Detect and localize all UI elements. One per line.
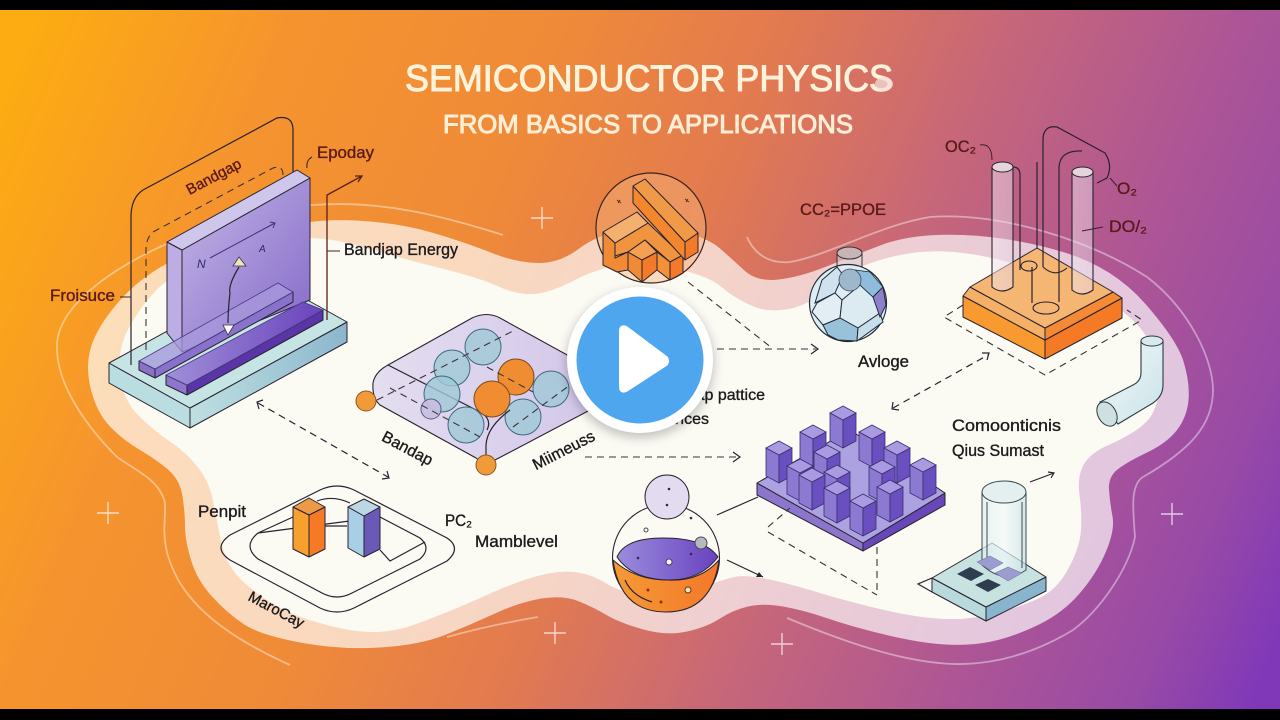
dashed double arrow left bbox=[258, 403, 388, 477]
platform upper layer bbox=[963, 248, 1122, 340]
orange block bbox=[293, 498, 325, 557]
block connectors bbox=[317, 498, 425, 561]
title smudge bbox=[875, 77, 893, 91]
small x marks bbox=[617, 199, 689, 203]
lattice stem bbox=[486, 410, 510, 456]
label: Qius Sumast: Qius Sumast bbox=[952, 442, 1044, 460]
blue block bbox=[348, 499, 380, 557]
tube right bbox=[1072, 167, 1093, 294]
substrate bbox=[932, 543, 1046, 621]
plate letter N: N bbox=[197, 257, 206, 271]
sparkle plus marks bbox=[97, 207, 1183, 655]
arrowheads left bbox=[257, 400, 389, 479]
label: OC2: OC₂ bbox=[945, 138, 976, 156]
prism front edge bbox=[388, 365, 489, 430]
arrowhead bbox=[756, 572, 763, 577]
bottom right facet bbox=[857, 313, 883, 341]
lower left block bbox=[603, 232, 628, 272]
circle lens bbox=[596, 173, 706, 283]
diagram: liquid sphere bbox=[612, 475, 720, 612]
back tube lines bbox=[1013, 127, 1110, 303]
long crystal bar bbox=[633, 179, 698, 260]
plate arrow bbox=[210, 222, 275, 258]
centre light facet bbox=[840, 285, 880, 328]
label: Froisuce: Froisuce bbox=[50, 287, 115, 305]
liquid arc bbox=[625, 580, 652, 602]
icon: bent pipe bbox=[1093, 336, 1163, 430]
outer rounded track bbox=[221, 486, 454, 612]
dashed connector from crystal bbox=[688, 282, 772, 348]
array base bbox=[757, 430, 945, 551]
dashed guides under array bbox=[768, 508, 877, 595]
diagram: orange platform with tubes bbox=[944, 127, 1147, 375]
pillars bbox=[766, 406, 936, 536]
leader ticks bbox=[120, 157, 340, 297]
dashed arrow to flask bbox=[717, 348, 816, 350]
label: Miimeuss: Miimeuss bbox=[530, 428, 598, 474]
flask neck bbox=[837, 247, 862, 275]
bar one bbox=[139, 283, 293, 378]
bottom blue facet bbox=[823, 318, 858, 341]
frame lines bbox=[131, 118, 293, 365]
label: PC2: PC₂ bbox=[445, 512, 472, 530]
arrow beyond sphere bbox=[727, 560, 763, 577]
small top circle bbox=[645, 475, 689, 519]
purple plate bbox=[167, 170, 310, 352]
lattice atom lilac bbox=[421, 399, 441, 419]
label: Penpit: Penpit bbox=[198, 503, 246, 521]
decorative contour lines bbox=[57, 204, 1213, 665]
label: Bandap: Bandap bbox=[379, 429, 436, 470]
lattice dashed axes bbox=[377, 330, 570, 437]
lattice atoms blue bbox=[424, 329, 569, 443]
tab outline bbox=[918, 578, 932, 592]
arrowhead to flask bbox=[811, 344, 818, 354]
top right blue facet bbox=[855, 270, 883, 297]
prism body bbox=[373, 314, 640, 462]
bar two bbox=[166, 302, 323, 395]
purple liquid surface bbox=[617, 538, 718, 580]
play button bbox=[566, 287, 714, 438]
label: Avloge: Avloge bbox=[858, 353, 909, 371]
energy arrow with triangles bbox=[223, 257, 246, 335]
label: Epoday: Epoday bbox=[317, 144, 375, 162]
label: Devices: Devices bbox=[652, 411, 709, 428]
diagram: purple pillar array bbox=[757, 406, 945, 551]
diagram: two-block circuit bbox=[198, 486, 558, 632]
arrowhead to array bbox=[733, 452, 740, 462]
left light facet bbox=[812, 293, 842, 325]
right lower block bbox=[657, 252, 683, 280]
inner rounded track bbox=[250, 517, 426, 597]
lattice atoms orange bbox=[474, 359, 534, 417]
chip squares lilac bbox=[977, 556, 1022, 581]
violet facet bbox=[873, 287, 886, 317]
chip squares dark bbox=[957, 567, 1001, 592]
arrow into array bbox=[717, 497, 758, 515]
sphere outline bbox=[612, 504, 720, 612]
diagram: polyhedral flask bbox=[800, 201, 909, 371]
bubbles bbox=[637, 488, 707, 604]
plate letter A: A bbox=[258, 244, 266, 255]
label: CC2=PPOE: CC₂=PPOE bbox=[800, 201, 886, 219]
inner cream blob panel bbox=[119, 238, 1161, 632]
label: Bandgap pattice: Bandgap pattice bbox=[649, 387, 765, 404]
diagram: substrate with cylinder bbox=[918, 417, 1061, 621]
second crystal bar top bbox=[603, 212, 648, 243]
diagram: lattice prism bbox=[356, 314, 640, 475]
dashed arrow to array bbox=[585, 456, 738, 458]
label: Comoonticnis: Comoonticnis bbox=[952, 417, 1061, 435]
subtitle: FROM BASICS TO APPLICATIONS bbox=[443, 109, 853, 139]
label: O2: O₂ bbox=[1117, 180, 1137, 198]
leader arrow bbox=[1030, 472, 1054, 482]
title: SEMICONDUCTOR PHYSICS bbox=[405, 58, 893, 99]
platform ports bbox=[1021, 261, 1067, 314]
sphere body bbox=[810, 264, 886, 342]
neck bubble bbox=[839, 269, 861, 291]
arm of second bar bbox=[615, 223, 685, 262]
arrowheads right bbox=[892, 353, 989, 410]
dashed double arrow right bbox=[893, 355, 988, 408]
label: Mamblevel: Mamblevel bbox=[475, 533, 558, 551]
diagram: crystal bars in circle bbox=[596, 173, 706, 283]
dashed footprint bbox=[944, 305, 1142, 375]
diagram: bandgap plate module bbox=[50, 118, 459, 428]
right leader arrow bbox=[327, 176, 362, 320]
small cube bbox=[628, 240, 657, 282]
label: Bandgap: Bandgap bbox=[183, 155, 244, 199]
orange nodes bbox=[356, 391, 496, 475]
base slab bbox=[109, 277, 347, 428]
orange liquid bbox=[613, 560, 719, 612]
outer halo of central blob bbox=[88, 220, 1189, 648]
label: DO/2: DO/₂ bbox=[1109, 218, 1147, 236]
platform lower layer bbox=[963, 296, 1122, 359]
glass cylinder bbox=[982, 481, 1026, 576]
tube leaders bbox=[980, 145, 1117, 231]
top left facet bbox=[815, 267, 843, 303]
tube left bbox=[992, 162, 1013, 291]
dashed frame bbox=[146, 167, 283, 350]
label: MaroCay: MaroCay bbox=[245, 588, 307, 632]
label: Bandjap Energy: Bandjap Energy bbox=[344, 241, 459, 259]
